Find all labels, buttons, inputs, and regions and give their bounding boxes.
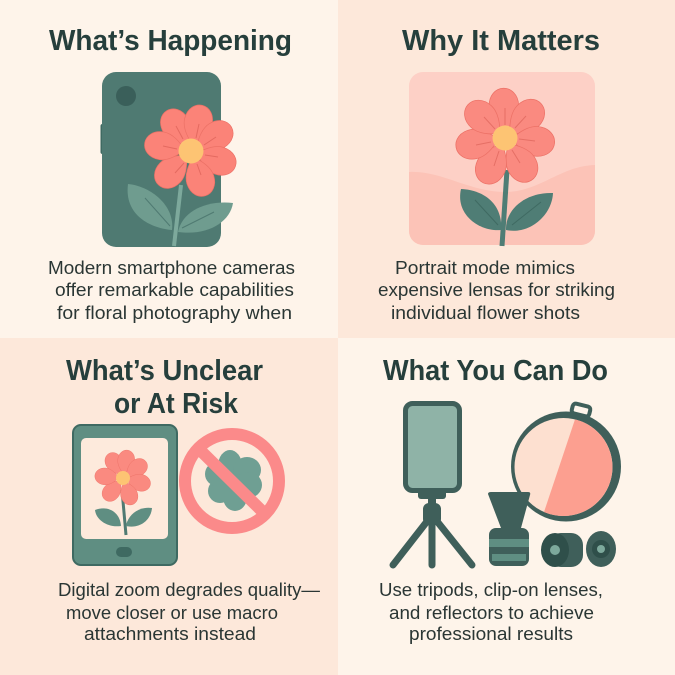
body text: why it matters: individual flower shots (391, 303, 580, 323)
icon: clip-on lens (488, 492, 530, 566)
body text: what you can do: professional results (409, 624, 573, 644)
heading: what's unclear or at risk: What’s Unclear (66, 355, 263, 387)
body text: what's unclear: Digital zoom degrades quality— (58, 580, 320, 600)
body text: what's happening (48, 258, 295, 323)
heading: what's happening: What’s Happening (49, 25, 292, 57)
body text: what you can do: and reflectors to achieve (389, 603, 594, 623)
icon: phone with flower (100, 72, 240, 247)
body text: what you can do: Use tripods, clip-on lenses, (379, 580, 603, 600)
panel: what's happening (0, 0, 338, 338)
body text: what's unclear: move closer or use macro (66, 603, 278, 623)
body text: what's happening: offer remarkable capabilities (55, 280, 294, 300)
body text: what's unclear (58, 580, 320, 644)
heading: what you can do: What You Can Do (383, 355, 608, 387)
heading: why it matters: Why It Matters (402, 25, 600, 57)
panel: why it matters (338, 0, 675, 338)
icon: portrait flower (409, 72, 595, 246)
panel: what's unclear or at risk (0, 338, 338, 675)
body text: what you can do (379, 580, 603, 644)
heading: what's unclear or at risk: or At Risk (114, 388, 239, 420)
body text: what's happening: Modern smartphone cameras (48, 258, 295, 278)
panel: what you can do (338, 338, 675, 675)
icon: reflector (511, 403, 621, 522)
icon: small lenses (541, 531, 616, 567)
body text: why it matters: Portrait mode mimics (395, 258, 575, 278)
icon: tablet with flower (73, 425, 177, 565)
body text: what's unclear: attachments instead (84, 624, 256, 644)
icon: phone on tripod (393, 404, 472, 565)
heading: what's unclear or at risk (66, 355, 263, 420)
body text: why it matters: expensive lensas for striking (378, 280, 615, 300)
body text: why it matters (378, 258, 615, 323)
body text: what's happening: for floral photography when (57, 303, 292, 323)
icon: prohibited blurry flower (185, 434, 279, 528)
